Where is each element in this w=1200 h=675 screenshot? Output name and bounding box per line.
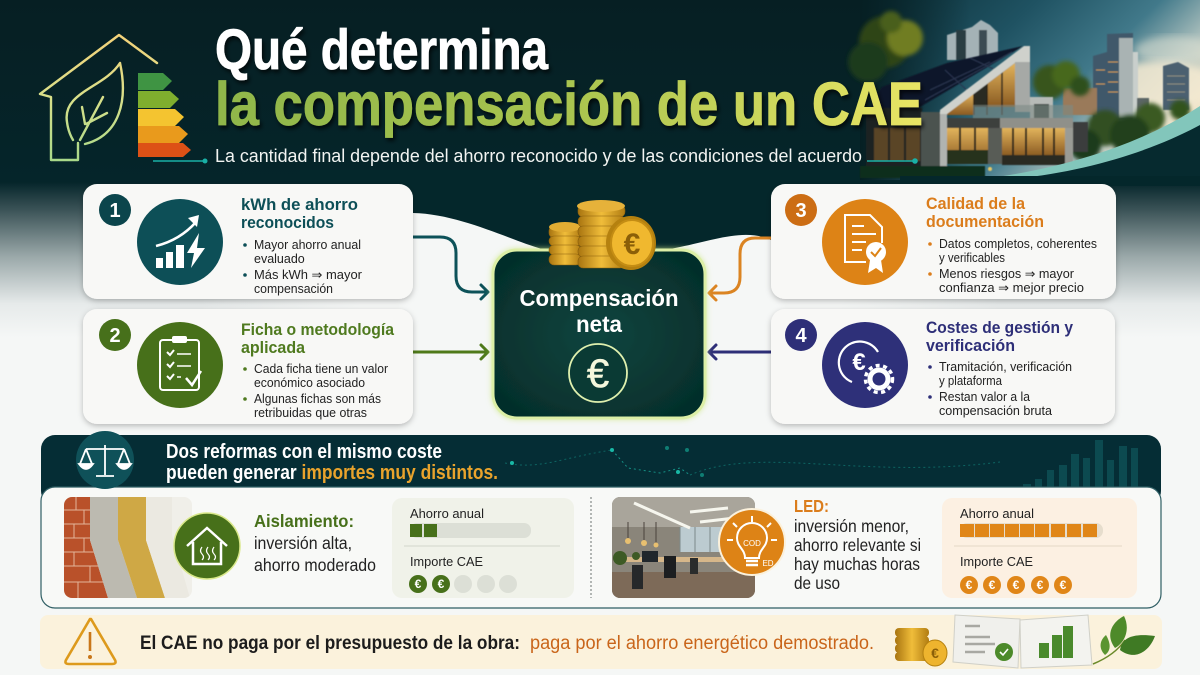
icon: chart with bolt — [137, 199, 223, 285]
stats: aislamiento: Importe CAE — [410, 554, 483, 569]
title — [215, 18, 923, 138]
logo: house with leaf and energy scale — [40, 35, 191, 160]
bullets — [243, 238, 362, 296]
number 2 — [99, 319, 131, 351]
title: Qué determina — [215, 18, 549, 82]
bullets: retribuidas que otras — [254, 406, 367, 420]
arrow: card 1 to centre — [413, 237, 488, 299]
heading — [926, 318, 1073, 355]
heading — [241, 195, 358, 232]
icon: house outline — [40, 35, 157, 160]
stats: LED: € — [1037, 578, 1044, 592]
message: El CAE no paga por el presupuesto de la obra: — [140, 633, 520, 654]
bullets: confianza ⇒ mejor precio — [939, 281, 1084, 295]
stats: LED: € — [1060, 578, 1067, 592]
photo: office — [612, 497, 755, 598]
stats: aislamiento: € — [415, 577, 422, 591]
bullets: Mayor ahorro anual — [254, 238, 361, 252]
teal curved band — [900, 106, 1200, 186]
icon: LED bulb: ED — [762, 559, 774, 568]
heading: Ficha o metodología — [241, 320, 394, 339]
label: Compensación — [520, 285, 678, 311]
icon: clipboard checklist — [137, 322, 223, 408]
icon: leaves — [1093, 616, 1155, 664]
text: LED: ahorro relevante si — [794, 535, 921, 555]
stats: aislamiento — [392, 498, 574, 598]
bullets: Datos completos, coherentes — [939, 237, 1097, 251]
icon: euro ring — [569, 344, 627, 402]
stats: LED: Ahorro anual — [960, 506, 1034, 521]
house and city photo — [848, 0, 1200, 180]
bullets: y verificables — [939, 251, 1005, 265]
panel: comparison — [41, 431, 1161, 608]
message — [140, 633, 874, 654]
heading: documentación — [926, 212, 1044, 231]
heading: aplicada — [241, 338, 306, 357]
bullets: Más kWh ⇒ mayor — [254, 268, 362, 282]
text: aislamiento: ahorro moderado — [254, 555, 376, 575]
panel: card 4 — [771, 309, 1115, 424]
icon: euro with gear: € — [852, 349, 866, 376]
label: neta — [576, 311, 622, 337]
bullets — [928, 360, 1072, 418]
energy rating bars — [138, 73, 191, 157]
number 1: 1 — [109, 200, 121, 222]
icon: document with seal — [822, 199, 908, 285]
text: aislamiento: inversión alta, — [254, 533, 352, 553]
arrow: card 2 to centre — [413, 345, 488, 359]
bullets — [928, 237, 1097, 295]
icon: euro ring: € — [587, 352, 609, 396]
heading: reconocidos — [241, 213, 334, 232]
photo: insulation layers — [64, 497, 192, 598]
bullets: compensación — [254, 282, 333, 296]
heading: kWh de ahorro — [241, 195, 358, 214]
stats: LED: € — [1013, 578, 1020, 592]
panel: card 1 — [83, 184, 413, 299]
icon: coin stacks: € — [624, 228, 641, 261]
heading: Calidad de la — [926, 194, 1026, 213]
title: la compensación de un CAE — [215, 70, 923, 138]
stats: LED: € — [966, 578, 973, 592]
house — [860, 46, 1088, 178]
number 4: 4 — [795, 325, 807, 347]
number 3: 3 — [795, 200, 807, 222]
panel: bottom banner — [40, 615, 1162, 669]
bullets: Cada ficha tiene un valor — [254, 362, 388, 376]
bullets: compensación bruta — [939, 404, 1052, 418]
bullets: económico asociado — [254, 376, 365, 390]
number 1 — [99, 194, 131, 226]
icon: insulated house — [174, 513, 240, 579]
heading — [241, 320, 394, 357]
bullets: y plataforma — [939, 374, 1002, 388]
subtitle: La cantidad final depende del ahorro reconocido y de las condiciones del acuerdo — [215, 146, 862, 166]
text: aislamiento: Aislamiento: — [254, 511, 354, 531]
text: LED: hay muchas horas — [794, 554, 920, 574]
text: LED: LED: — [794, 496, 829, 516]
icon: LED bulb: COD — [743, 539, 761, 548]
panel: card 3 — [771, 184, 1116, 299]
heading: Costes de gestión y — [926, 318, 1073, 337]
bullets — [243, 362, 388, 420]
label — [520, 285, 678, 337]
arrow: card 4 to centre — [709, 345, 771, 359]
bullets: Menos riesgos ⇒ mayor — [939, 267, 1074, 281]
heading — [926, 194, 1044, 231]
trees — [848, 11, 1190, 161]
heading: verificación — [926, 336, 1015, 355]
text: aislamiento — [254, 511, 376, 575]
number 2: 2 — [109, 325, 121, 347]
message: paga por el ahorro energético demostrado. — [530, 633, 874, 654]
bullets: evaluado — [254, 252, 305, 266]
text: LED: de uso — [794, 573, 840, 593]
icon: scales — [76, 431, 134, 489]
arrow: card 3 to centre — [709, 238, 771, 300]
distant towers — [947, 20, 1189, 120]
bullets: Algunas fichas son más — [254, 392, 381, 406]
stats: aislamiento: Ahorro anual — [410, 506, 484, 521]
icon: report papers — [953, 615, 1092, 668]
text: LED: inversión menor, — [794, 516, 909, 536]
icon: coins: € — [931, 645, 939, 661]
bullets: Tramitación, verificación — [939, 360, 1072, 374]
header band — [41, 435, 1161, 505]
number 3 — [785, 194, 817, 226]
header band: Dos reformas con el mismo coste — [166, 441, 442, 463]
number 4 — [785, 319, 817, 351]
panel: compensación neta — [493, 200, 705, 418]
bullets: Restan valor a la — [939, 390, 1030, 404]
icon: warning triangle — [65, 619, 116, 664]
icon: euro with gear — [822, 322, 908, 408]
icon: LED bulb — [719, 509, 785, 575]
icon: coins — [895, 628, 947, 666]
panel: card 2 — [83, 309, 413, 424]
stats: LED: Importe CAE — [960, 554, 1033, 569]
stats: aislamiento: € — [438, 577, 445, 591]
text: LED — [794, 496, 921, 593]
body — [41, 487, 1161, 608]
stats: LED: € — [989, 578, 996, 592]
icon: coin stacks — [549, 200, 656, 270]
header band: pueden generar importes muy distintos. — [166, 462, 498, 484]
stats: LED — [942, 498, 1137, 598]
